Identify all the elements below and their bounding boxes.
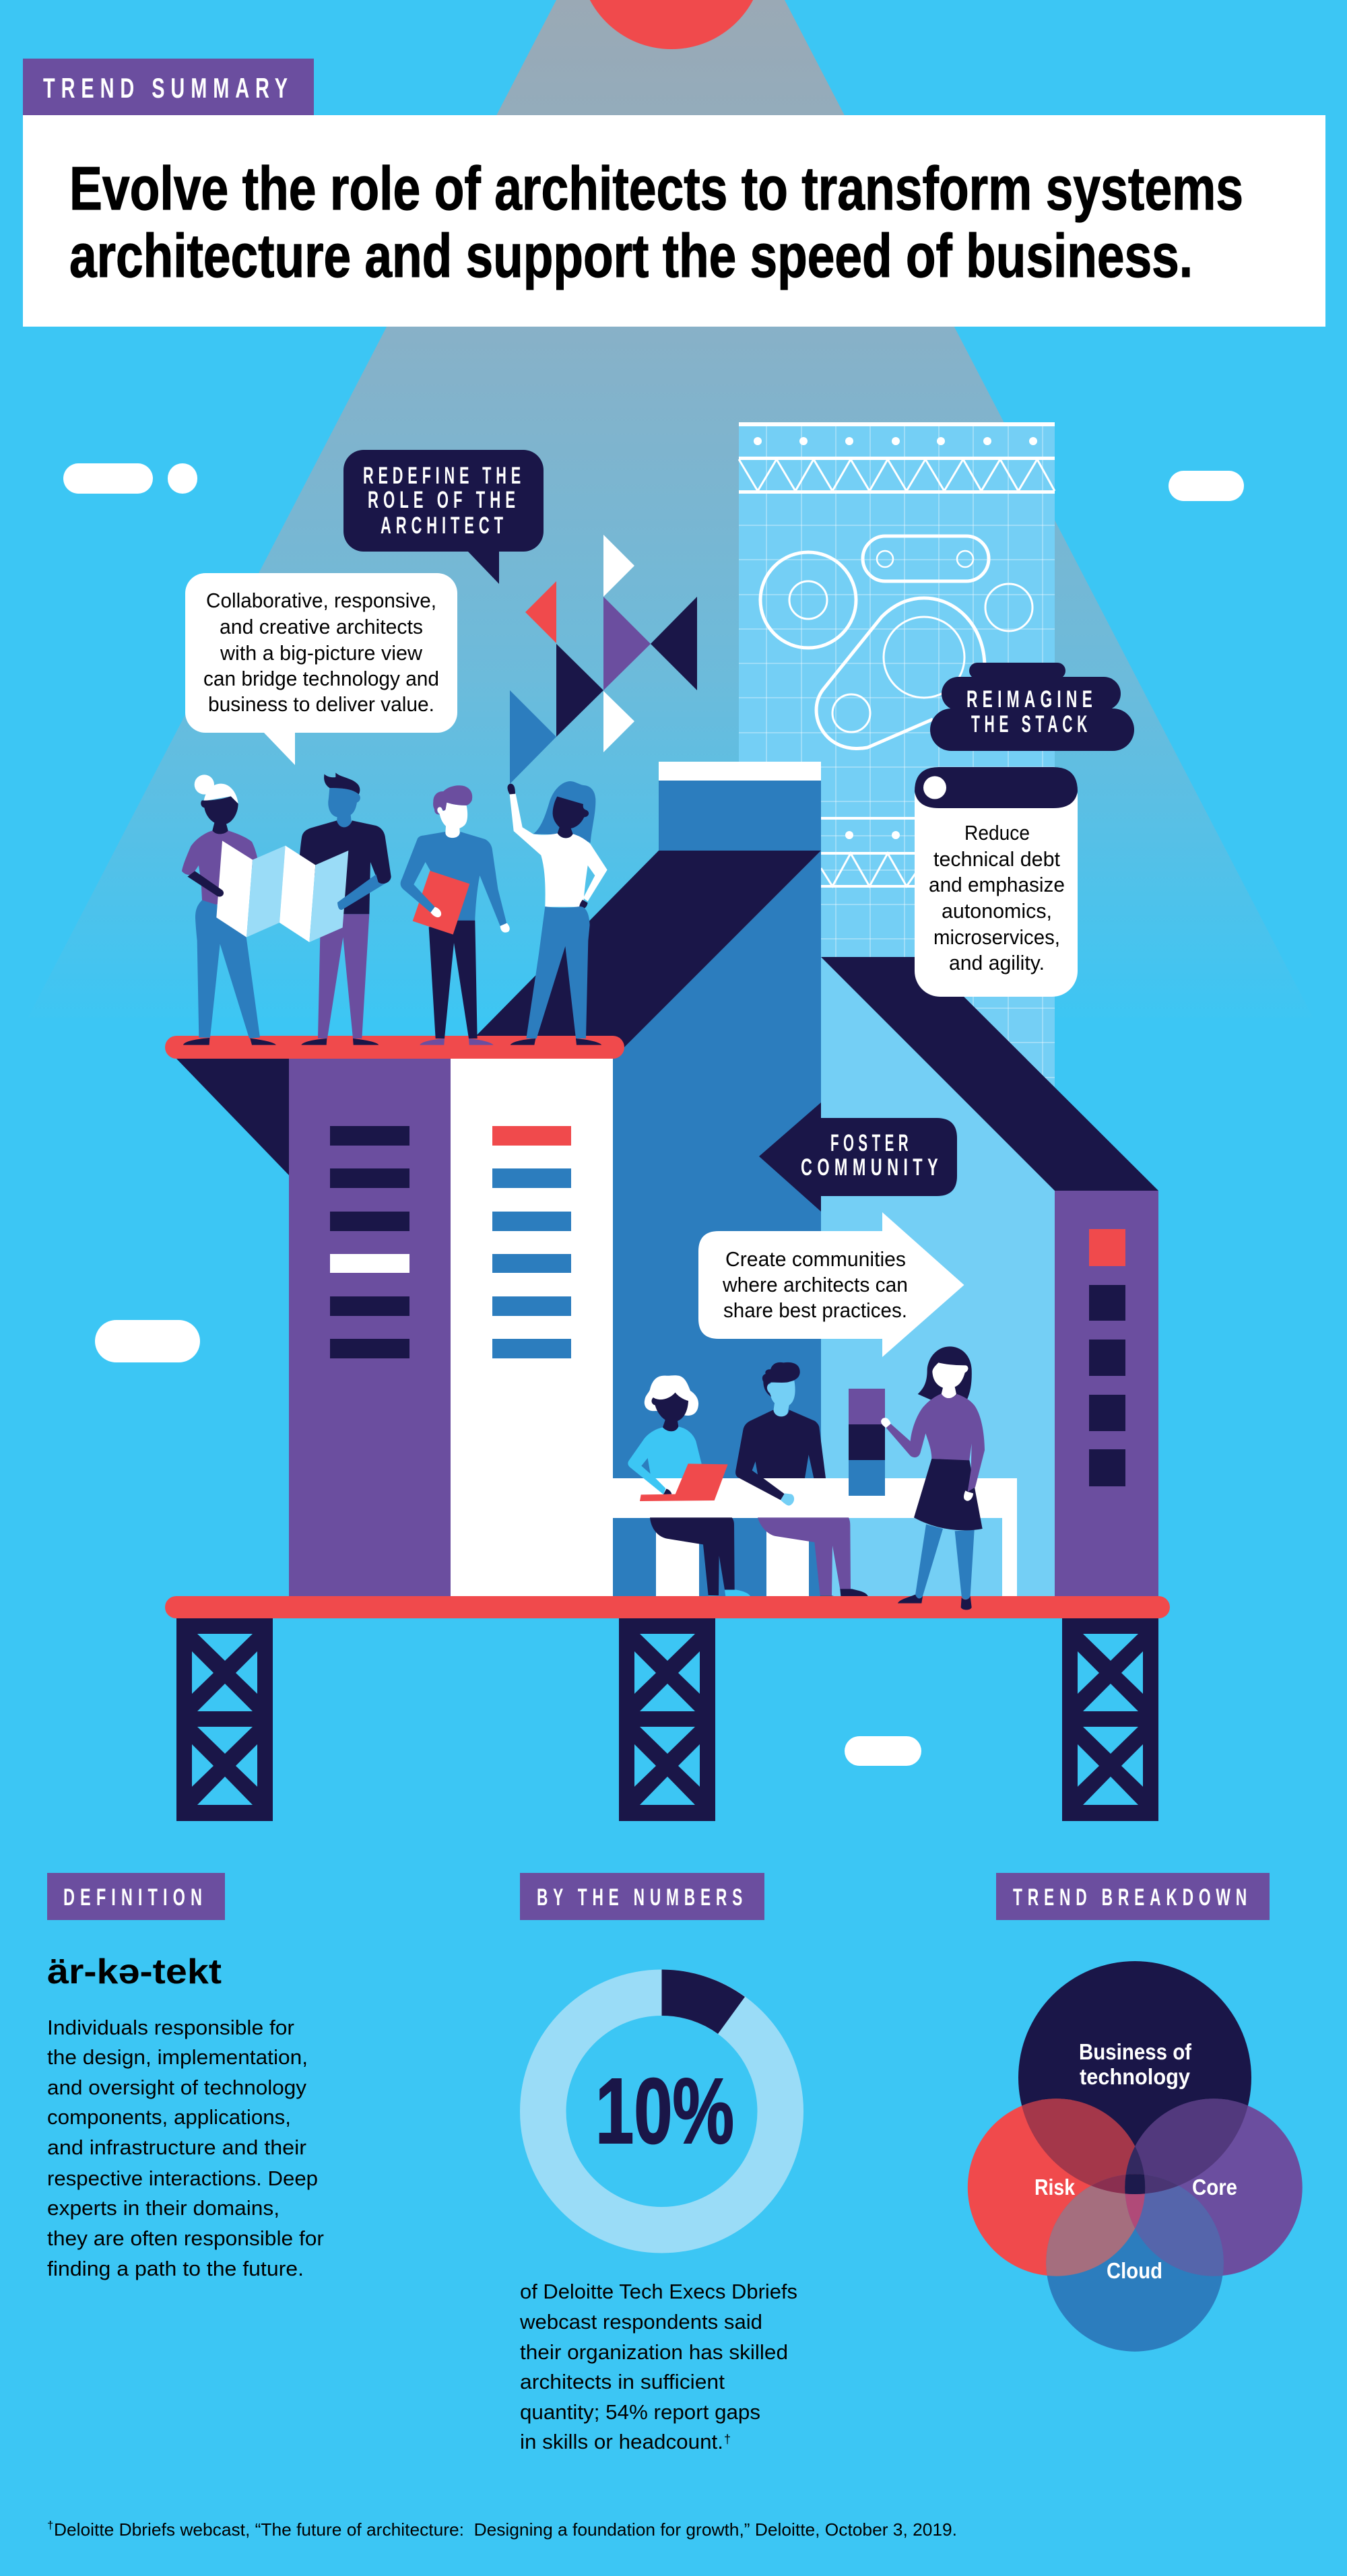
central blue tower xyxy=(475,762,821,1596)
title panel xyxy=(23,115,1325,327)
statistic text: of Deloitte Tech Execs Dbriefs xyxy=(520,2280,797,2303)
figure: woman with bun holding map xyxy=(182,774,276,1045)
definition text xyxy=(47,2016,324,2280)
support legs xyxy=(176,1618,1158,1821)
statistic text: quantity; 54% report gaps xyxy=(520,2400,760,2424)
blueprint panel xyxy=(739,422,1055,1145)
callout: collaborative architects: can bridge technology and xyxy=(203,667,439,690)
definition tab: DEFINITION xyxy=(63,1884,207,1911)
section: by the numbers xyxy=(519,1873,797,2453)
callout: foster community arrow: FOSTER xyxy=(830,1130,913,1156)
tab: trend summary: TREND SUMMARY xyxy=(43,72,294,104)
by the numbers tab: BY THE NUMBERS xyxy=(537,1884,748,1911)
donut chart xyxy=(543,1969,781,2230)
callout: redefine the role of the architect: ARCHITECT xyxy=(381,513,508,539)
figure: seated man xyxy=(735,1362,868,1603)
definition text: the design, implementation, xyxy=(47,2045,308,2069)
stacked blocks xyxy=(849,1389,885,1496)
tab: trend summary xyxy=(23,59,314,115)
top platform xyxy=(165,1036,624,1059)
statistic text: architects in sufficient xyxy=(520,2370,725,2393)
figure: woman raising arm xyxy=(508,781,607,1045)
venn diagram: Business of xyxy=(1079,2039,1192,2064)
callout: create communities arrow: where architects can xyxy=(722,1273,908,1296)
statistic text: their organization has skilled xyxy=(520,2340,788,2364)
callout: collaborative architects: business to deliver value. xyxy=(208,692,434,716)
callout: foster community arrow xyxy=(759,1102,957,1212)
statistic text xyxy=(519,2280,797,2453)
callout: reimagine the stack: REIMAGINE xyxy=(966,686,1097,713)
sun xyxy=(579,0,764,49)
venn diagram: technology xyxy=(1080,2064,1191,2089)
definition text: Individuals responsible for xyxy=(47,2016,294,2039)
figure: man with blue skin holding map xyxy=(300,772,391,1045)
statistic text: † xyxy=(724,2433,731,2446)
definition text: finding a path to the future. xyxy=(47,2257,304,2280)
callout: collaborative architects: and creative architects xyxy=(220,615,423,638)
trend breakdown tab xyxy=(996,1873,1270,1920)
definition text: components, applications, xyxy=(47,2105,291,2129)
callout: reduce technical debt: technical debt xyxy=(933,847,1060,871)
section: trend breakdown xyxy=(968,1873,1303,2352)
footnote: Deloitte Dbriefs webcast, “The future of architecture: Designing a foundation for growth,” Deloitte, October 3, 2019. xyxy=(54,2519,957,2540)
callout: reduce technical debt: and emphasize xyxy=(929,873,1065,896)
table and stools xyxy=(613,1478,1017,1596)
callout: collaborative architects xyxy=(185,573,457,765)
definition text: and oversight of technology xyxy=(47,2076,306,2099)
left purple and white towers xyxy=(176,1059,613,1596)
donut chart: 10% xyxy=(595,2059,734,2163)
definition word: är-kə-tekt xyxy=(47,1952,222,1991)
definition tab xyxy=(47,1873,225,1920)
statistic text: webcast respondents said xyxy=(519,2310,762,2334)
callout: reduce technical debt: microservices, xyxy=(933,925,1060,949)
callout: reduce technical debt: and agility. xyxy=(949,951,1045,975)
figure: man with purple hair and red clipboard xyxy=(401,785,510,1045)
by the numbers tab xyxy=(520,1873,764,1920)
callout: reduce technical debt: Reduce xyxy=(964,821,1030,845)
callout: reduce technical debt xyxy=(915,767,1078,997)
definition text: they are often responsible for xyxy=(47,2226,324,2250)
light beam xyxy=(28,0,1313,1018)
callout: create communities arrow: share best practices. xyxy=(723,1298,907,1322)
right light blue wing xyxy=(821,957,1158,1596)
clouds xyxy=(63,463,1244,1766)
bottom platform xyxy=(165,1596,1170,1618)
footnote: † xyxy=(47,2519,53,2532)
callout: collaborative architects: with a big-picture view xyxy=(220,641,423,665)
triangle pattern xyxy=(510,535,697,784)
callout: reduce technical debt: autonomics, xyxy=(942,899,1052,923)
callout: collaborative architects: Collaborative, responsive, xyxy=(206,589,436,612)
callout: create communities arrow xyxy=(698,1212,964,1357)
venn diagram: Risk xyxy=(1034,2175,1076,2200)
definition text: respective interactions. Deep xyxy=(47,2167,318,2190)
callout: redefine the role of the architect: ROLE OF THE xyxy=(368,487,520,513)
figure: seated woman with laptop xyxy=(628,1375,750,1602)
venn diagram xyxy=(968,1961,1303,2352)
callout: reimagine the stack: THE STACK xyxy=(971,711,1092,737)
callout: create communities arrow: Create communities xyxy=(725,1247,906,1271)
venn diagram: Cloud xyxy=(1107,2258,1162,2283)
section: definition xyxy=(47,1873,324,2280)
statistic text: in skills or headcount. xyxy=(520,2430,723,2453)
right purple tower xyxy=(1055,1191,1158,1596)
definition text: and infrastructure and their xyxy=(47,2136,306,2159)
folded map xyxy=(187,840,387,942)
callout: foster community arrow: COMMUNITY xyxy=(801,1154,943,1181)
definition text: experts in their domains, xyxy=(47,2196,280,2220)
venn diagram: Core xyxy=(1192,2175,1237,2200)
callout: redefine the role of the architect: REDEFINE THE xyxy=(363,463,525,489)
blueprint machine parts xyxy=(760,536,1032,749)
callout: reimagine the stack xyxy=(930,663,1134,751)
callout: redefine the role of the architect xyxy=(343,450,544,584)
figure: standing woman xyxy=(881,1346,985,1610)
